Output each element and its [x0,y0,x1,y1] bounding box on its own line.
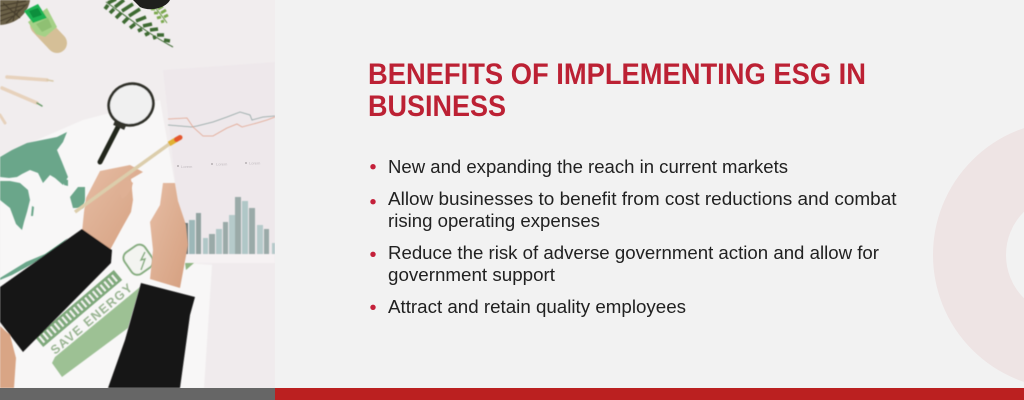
fern leaves [105,0,173,47]
line chart [168,112,275,136]
paper sheets [0,101,211,388]
benefit 2 [370,189,896,231]
pencils [0,77,53,123]
magnifying glass [100,78,159,162]
bottom bar: red [275,388,1024,400]
benefit 3 [370,243,879,285]
bar chart [183,197,275,254]
bottom bar: grey [0,388,275,400]
benefit 3: Reduce the risk of adverse government action and allow for [388,243,879,263]
chart legend [177,162,260,168]
benefit 1: New and expanding the reach in current markets [388,157,788,177]
right hand and sleeve [108,183,195,388]
world map [0,132,85,280]
yarn ball [0,0,30,25]
title [368,58,866,123]
title: BENEFITS OF IMPLEMENTING ESG IN [368,58,866,91]
save energy poster: SAVE ENERGY [48,281,136,357]
chart legend: Lorem [181,164,193,169]
black pot [133,0,170,9]
benefit 3: government support [388,265,555,285]
benefit 2: rising operating expenses [388,211,600,231]
title: BUSINESS [368,90,506,123]
decorative ring [970,158,1024,352]
benefit 4: Attract and retain quality employees [388,297,686,317]
pencil sharpener tube [24,4,57,43]
save energy poster [39,242,194,377]
pencil held in hand [75,138,180,212]
photo: desk with charts, map and hands [0,0,275,388]
benefit 2: Allow businesses to benefit from cost reductions and combat [388,189,896,209]
chart legend: Lorem [216,162,228,166]
benefits list [370,157,896,317]
left hand and sleeve [0,165,143,388]
chart legend: Lorem [249,160,261,166]
